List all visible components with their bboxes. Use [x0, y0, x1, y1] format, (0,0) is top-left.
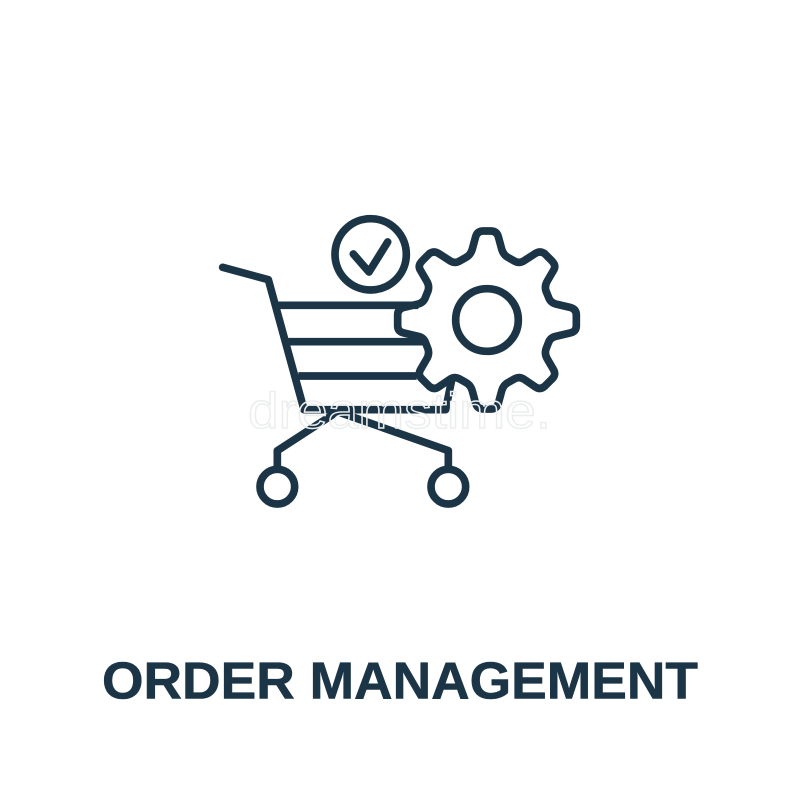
gear hub — [456, 289, 518, 351]
icon: check mark badge — [335, 219, 406, 290]
right wheel — [431, 469, 466, 504]
icon: shopping cart — [223, 267, 466, 504]
gear outline — [398, 231, 576, 409]
icon: gear — [398, 231, 576, 409]
watermark: dreamstime. — [248, 383, 551, 439]
check mark — [353, 242, 388, 272]
cart handle and left side — [223, 267, 452, 410]
left wheel — [260, 469, 295, 504]
badge circle — [335, 219, 406, 290]
icon: order management cart with check and gear — [223, 219, 576, 504]
cart wheel struts — [277, 412, 448, 467]
title: ORDER MANAGEMENT — [102, 652, 698, 710]
cart shelf lines — [278, 305, 423, 376]
